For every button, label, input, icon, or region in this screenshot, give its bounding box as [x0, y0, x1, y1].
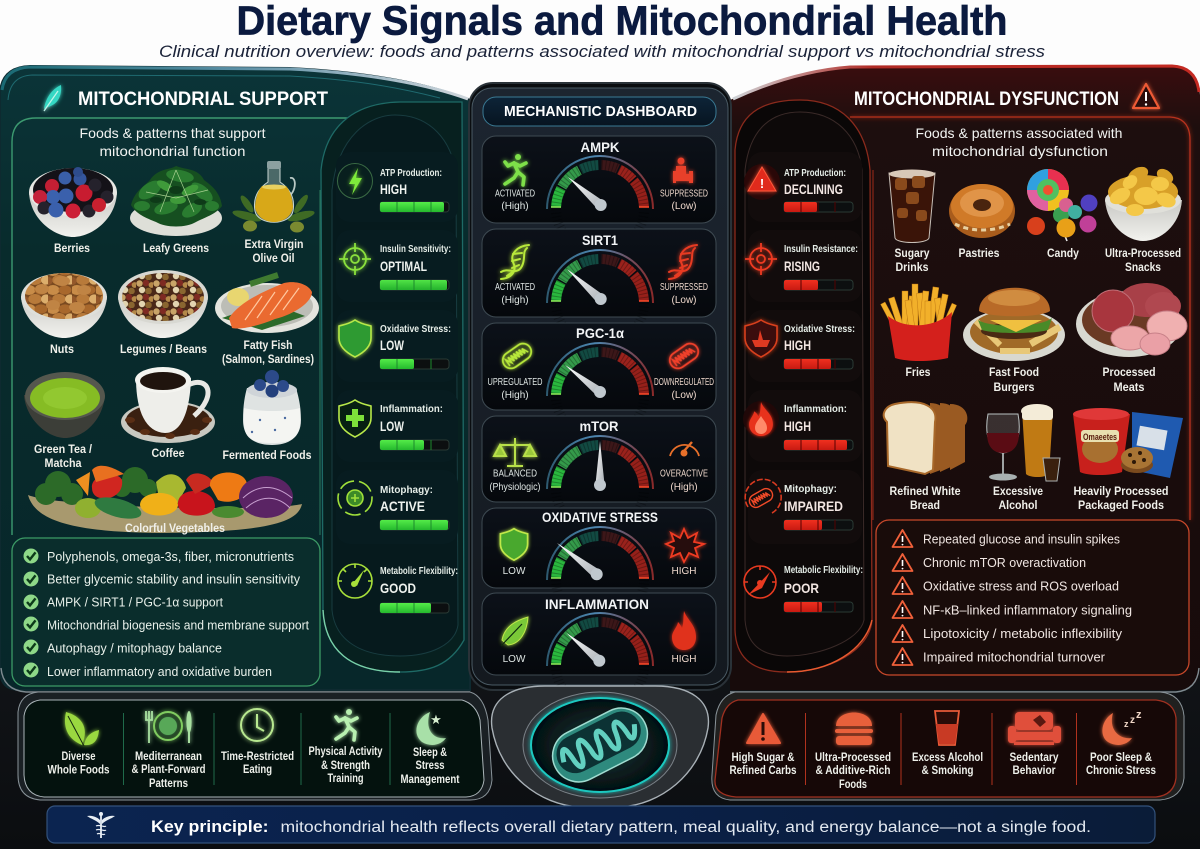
panel: dysfunction status column [735, 100, 872, 672]
status: inflammation [743, 390, 862, 462]
gauge: AMPK: (High) [501, 201, 529, 212]
habit: ultra-processed foods: Foods [839, 777, 867, 791]
food: pastries [949, 184, 1015, 260]
status: mitophagy [745, 470, 862, 544]
habit: sleep and stress: Sleep & [413, 745, 447, 759]
icon: dna green [501, 245, 529, 279]
gauge: oxidative stress: HIGH [672, 566, 696, 577]
food: coffee: Coffee [152, 446, 185, 460]
subheading: mitochondrial function [100, 143, 246, 159]
panel: dysfunction checklist [876, 520, 1189, 675]
status: inflammation: Inflammation: [784, 403, 847, 415]
panel: support checklist: Better glycemic stability and insulin sensitivity [47, 572, 300, 586]
habit: sleep and stress: Management [400, 772, 460, 786]
gauge: PGC-1 alpha: DOWNREGULATED [654, 377, 714, 388]
habit: sleep and stress: Stress [416, 758, 445, 772]
panel: support checklist: Polyphenols, omega-3s, fiber, micronutrients [47, 549, 294, 564]
gauge: mTOR [482, 416, 716, 533]
status: metabolic flexibility: Metabolic Flexibility: [784, 564, 863, 576]
status: ATP production [744, 152, 862, 222]
food: fatty fish: Fatty Fish [244, 338, 292, 352]
gauge: SIRT1: SUPPRESSED [660, 282, 708, 293]
habit: physical activity [308, 709, 383, 785]
gauge: inflammation: HIGH [672, 654, 696, 665]
panel: support checklist: Autophagy / mitophagy balance [47, 640, 222, 656]
gauge: AMPK: (Low) [671, 201, 697, 212]
food: heavily processed packaged foods: Heavily Processed [1074, 484, 1168, 498]
gauge: SIRT1: (High) [501, 295, 529, 306]
habit: poor sleep: Chronic Stress [1086, 763, 1156, 777]
food: excessive alcohol: Excessive [993, 484, 1043, 498]
status: ATP production: DECLINING [784, 181, 843, 197]
food: ultra-processed snacks [1105, 163, 1182, 274]
icon: leaf green [501, 617, 528, 646]
key principle banner: Key principle: [151, 817, 268, 836]
habit: time-restricted eating: Time-Restricted [221, 749, 294, 763]
status: mitophagy: Mitophagy: [380, 484, 433, 496]
gauge: AMPK [482, 136, 716, 253]
habit: sleep and stress [400, 712, 460, 786]
habit: diverse whole foods: Diverse [62, 749, 96, 763]
dashboard heading: MECHANISTIC DASHBOARD [504, 103, 697, 120]
gauge: PGC-1 alpha: (High) [501, 390, 529, 401]
status: metabolic flexibility: GOOD [380, 580, 416, 596]
status: metabolic flexibility [744, 564, 863, 612]
food: colorful vegetables: Colorful Vegetables [125, 521, 225, 535]
panel: dysfunction checklist: Repeated glucose and insulin spikes [923, 532, 1120, 546]
gauge: inflammation: INFLAMMATION [545, 596, 649, 612]
food: fatty fish [215, 275, 319, 366]
status: mitophagy [336, 470, 458, 544]
food: fast food burger [963, 288, 1065, 394]
status: ATP production: ! [760, 176, 764, 191]
food: fries [881, 284, 957, 379]
gauge: mTOR: BALANCED [493, 468, 537, 480]
panel: support status column [321, 102, 464, 672]
icon: shield green [500, 529, 528, 560]
food: processed meats: Processed [1102, 365, 1156, 379]
habit: physical activity: & Strength [321, 758, 370, 772]
habit: high sugar: Refined Carbs [730, 763, 797, 777]
status: inflammation [336, 390, 458, 462]
status: oxidative stress [745, 310, 862, 382]
food: legumes and beans: Legumes / Beans [120, 342, 207, 356]
icon: warning triangle [1133, 84, 1159, 108]
status: oxidative stress [336, 310, 458, 382]
dashboard heading [483, 97, 716, 126]
subheading [80, 125, 266, 159]
subtitle: Clinical nutrition overview: foods and patterns associated with mitochondrial support vs mitochondrial stress [159, 42, 1046, 61]
gauge: PGC-1 alpha: UPREGULATED [488, 377, 542, 388]
gauge: inflammation: LOW [503, 654, 526, 665]
foods box outline [850, 117, 1190, 520]
habit: poor sleep [1086, 709, 1156, 777]
icon: runner [505, 154, 526, 185]
icon: dial orange [670, 442, 699, 456]
gauge: PGC-1 alpha: (Low) [671, 390, 697, 401]
panel: dysfunction checklist: NF-κB–linked inflammatory signaling [923, 602, 1132, 618]
food: refined white bread: Bread [910, 498, 940, 512]
subheading [916, 125, 1122, 159]
panel: harmful habits strip [712, 692, 1184, 800]
gauge: SIRT1: SIRT1 [582, 232, 618, 248]
status: insulin resistance: Insulin Resistance: [784, 243, 858, 255]
key principle banner [47, 806, 1155, 843]
status: ATP production: ATP Production: [380, 167, 442, 179]
subheading: Foods & patterns that support [80, 125, 266, 141]
habit: poor sleep: z [1124, 719, 1129, 729]
foods box outline [12, 118, 350, 535]
food: ultra-processed snacks: Snacks [1125, 260, 1161, 274]
status: insulin sensitivity: OPTIMAL [380, 258, 427, 274]
panel: dysfunction checklist: Lipotoxicity / metabolic inflexibility [923, 626, 1123, 641]
gauge: SIRT1: ACTIVATED [495, 282, 535, 293]
habit: alcohol and smoking [912, 711, 983, 777]
icon: leaf [44, 85, 61, 111]
panel: support checklist: Mitochondrial biogenesis and membrane support [47, 618, 309, 632]
food: green tea matcha [24, 372, 105, 470]
food: refined white bread: Refined White [890, 484, 961, 498]
food: candy: Candy [1047, 246, 1079, 260]
panel: mitochondrial support [0, 66, 470, 692]
icon: scales [494, 438, 536, 466]
status: insulin resistance: RISING [784, 258, 820, 274]
habit: ultra-processed foods: & Additive-Rich [816, 763, 890, 777]
habit: diverse whole foods: Whole Foods [48, 762, 110, 776]
status: ATP production: HIGH [380, 181, 407, 197]
habit: mediterranean patterns: Patterns [149, 776, 188, 790]
habit: time-restricted eating: Eating [243, 762, 272, 776]
gauge: mTOR: mTOR [580, 418, 618, 434]
food: fermented foods [222, 370, 312, 462]
status: insulin sensitivity: Insulin Sensitivity: [380, 243, 451, 255]
habit: sedentary behavior [1008, 712, 1061, 777]
panel: mitochondrial dysfunction [730, 66, 1200, 692]
gauge: AMPK: AMPK [580, 139, 620, 155]
food: excessive alcohol [987, 404, 1060, 512]
food: fatty fish: (Salmon, Sardines) [222, 352, 314, 366]
status: metabolic flexibility [338, 564, 458, 613]
food: leafy greens [130, 166, 222, 255]
panel: supportive habits strip [18, 692, 492, 800]
gauge: oxidative stress: LOW [503, 566, 526, 577]
habit: sedentary behavior: Sedentary [1010, 750, 1059, 764]
food: leafy greens: Leafy Greens [143, 241, 209, 255]
food: extra virgin olive oil: Extra Virgin [244, 237, 304, 251]
habit: high sugar: High Sugar & [732, 750, 795, 764]
habit: mediterranean patterns [132, 711, 206, 790]
status: oxidative stress: Oxidative Stress: [784, 323, 855, 335]
gauge: AMPK: ACTIVATED [495, 188, 535, 200]
habit: sedentary behavior: Behavior [1012, 763, 1056, 777]
habit: diverse whole foods [48, 712, 110, 776]
habit: high sugar [730, 714, 797, 777]
habit: alcohol and smoking: & Smoking [922, 763, 974, 777]
gauge: PGC-1 alpha [482, 323, 716, 440]
habit: sleep and stress: ★ [430, 712, 442, 727]
header: mitochondrial dysfunction: MITOCHONDRIAL DYSFUNCTION [854, 89, 1119, 110]
food: green tea matcha: Green Tea / [34, 442, 93, 456]
status: ATP production: ATP Production: [784, 167, 846, 179]
food: nuts [21, 273, 107, 356]
status: insulin sensitivity [336, 230, 458, 302]
gauge: PGC-1 alpha: PGC-1α [576, 325, 624, 341]
status: inflammation: HIGH [784, 418, 811, 434]
food: berries: Berries [54, 241, 90, 255]
habit: poor sleep: Poor Sleep & [1090, 750, 1152, 764]
habit: mediterranean patterns: Mediterranean [135, 749, 202, 763]
status: mitophagy: ACTIVE [380, 498, 425, 514]
gauge: oxidative stress: OXIDATIVE STRESS [542, 509, 658, 525]
header: mitochondrial support [44, 85, 328, 111]
habit: alcohol and smoking: Excess Alcohol [912, 750, 983, 764]
status: oxidative stress: Oxidative Stress: [380, 323, 451, 335]
panel: support checklist: Lower inflammatory and oxidative burden [47, 664, 272, 679]
food: ultra-processed snacks: Ultra-Processed [1105, 246, 1181, 260]
icon: caduceus [87, 812, 115, 838]
food: heavily processed packaged foods: Packaged Foods [1078, 498, 1164, 512]
food: fast food burger: Burgers [994, 380, 1035, 394]
food: legumes and beans [118, 270, 208, 356]
habit: mediterranean patterns: & Plant-Forward [132, 762, 206, 776]
food: extra virgin olive oil [231, 161, 316, 265]
panel: support checklist [12, 538, 320, 686]
panel: dysfunction checklist: Impaired mitochondrial turnover [923, 650, 1106, 664]
subheading: mitochondrial dysfunction [932, 143, 1108, 159]
panel: dysfunction checklist: Oxidative stress and ROS overload [923, 578, 1119, 594]
food: green tea matcha: Matcha [44, 456, 82, 470]
food: fast food burger: Fast Food [989, 365, 1039, 379]
food: candy [1027, 169, 1098, 260]
food: pastries: Pastries [958, 246, 1000, 260]
habit: physical activity: Training [328, 771, 364, 785]
gauge: mTOR: OVERACTIVE [660, 468, 708, 480]
status: inflammation: LOW [380, 418, 405, 434]
status: mitophagy: Mitophagy: [784, 483, 837, 495]
food: processed meats: Meats [1114, 380, 1145, 394]
food: fermented foods: Fermented Foods [222, 448, 312, 462]
icon: dna red [669, 245, 697, 279]
status: insulin resistance [745, 230, 862, 302]
status: oxidative stress: LOW [380, 337, 405, 353]
food: refined white bread [884, 402, 967, 512]
panel: mechanistic dashboard [469, 83, 731, 710]
subheading: Foods & patterns associated with [916, 125, 1122, 141]
header: mitochondrial support: MITOCHONDRIAL SUPPORT [78, 89, 328, 110]
status: inflammation: Inflammation: [380, 403, 443, 415]
food: sugary drinks [889, 170, 935, 274]
food: heavily processed packaged foods: Omaeetes [1083, 432, 1117, 442]
habit: ultra-processed foods: Ultra-Processed [815, 750, 891, 764]
food: berries [29, 167, 117, 255]
habit: poor sleep: z [1130, 715, 1135, 726]
panel: support checklist: AMPK / SIRT1 / PGC-1α support [47, 594, 223, 610]
status: mitophagy: IMPAIRED [784, 498, 843, 514]
gauge: mTOR: (High) [670, 482, 698, 493]
food: extra virgin olive oil: Olive Oil [252, 251, 294, 265]
food: excessive alcohol: Alcohol [998, 498, 1038, 512]
status: ATP production [336, 152, 458, 222]
icon: mitochondrion red [667, 340, 701, 372]
food: sugary drinks: Sugary [894, 246, 930, 260]
emblem: mitochondrion [492, 686, 708, 807]
gauge: AMPK: SUPPRESSED [660, 188, 708, 200]
key principle banner: mitochondrial health reflects overall dietary pattern, meal quality, and energy balance—not a single food. [280, 819, 1091, 836]
food: colorful vegetables [28, 466, 302, 535]
food: nuts: Nuts [50, 342, 74, 356]
food: coffee [121, 367, 215, 460]
gauge: inflammation [482, 593, 716, 710]
habit: physical activity: Physical Activity [308, 744, 383, 758]
status: metabolic flexibility: Metabolic Flexibility: [380, 565, 458, 577]
gauge: oxidative stress [482, 508, 716, 624]
gauge: mTOR: (Physiologic) [490, 482, 540, 493]
icon: burst red [666, 529, 704, 562]
gauge: SIRT1 [482, 229, 716, 347]
food: sugary drinks: Drinks [896, 260, 929, 274]
icon: armchair [673, 158, 693, 183]
habit: ultra-processed foods [815, 712, 891, 791]
icon: flame red [672, 611, 696, 650]
food: heavily processed packaged foods [1073, 408, 1183, 512]
habit: time-restricted eating [221, 709, 294, 776]
status: metabolic flexibility: POOR [784, 580, 819, 596]
gauge: SIRT1: (Low) [671, 295, 697, 306]
status: oxidative stress: HIGH [784, 337, 811, 353]
icon: mitochondrion green [500, 340, 534, 372]
panel: dysfunction checklist: Chronic mTOR overactivation [923, 555, 1086, 570]
habit: poor sleep: z [1136, 709, 1142, 721]
food: processed meats [1076, 283, 1187, 394]
food: fries: Fries [906, 365, 931, 379]
